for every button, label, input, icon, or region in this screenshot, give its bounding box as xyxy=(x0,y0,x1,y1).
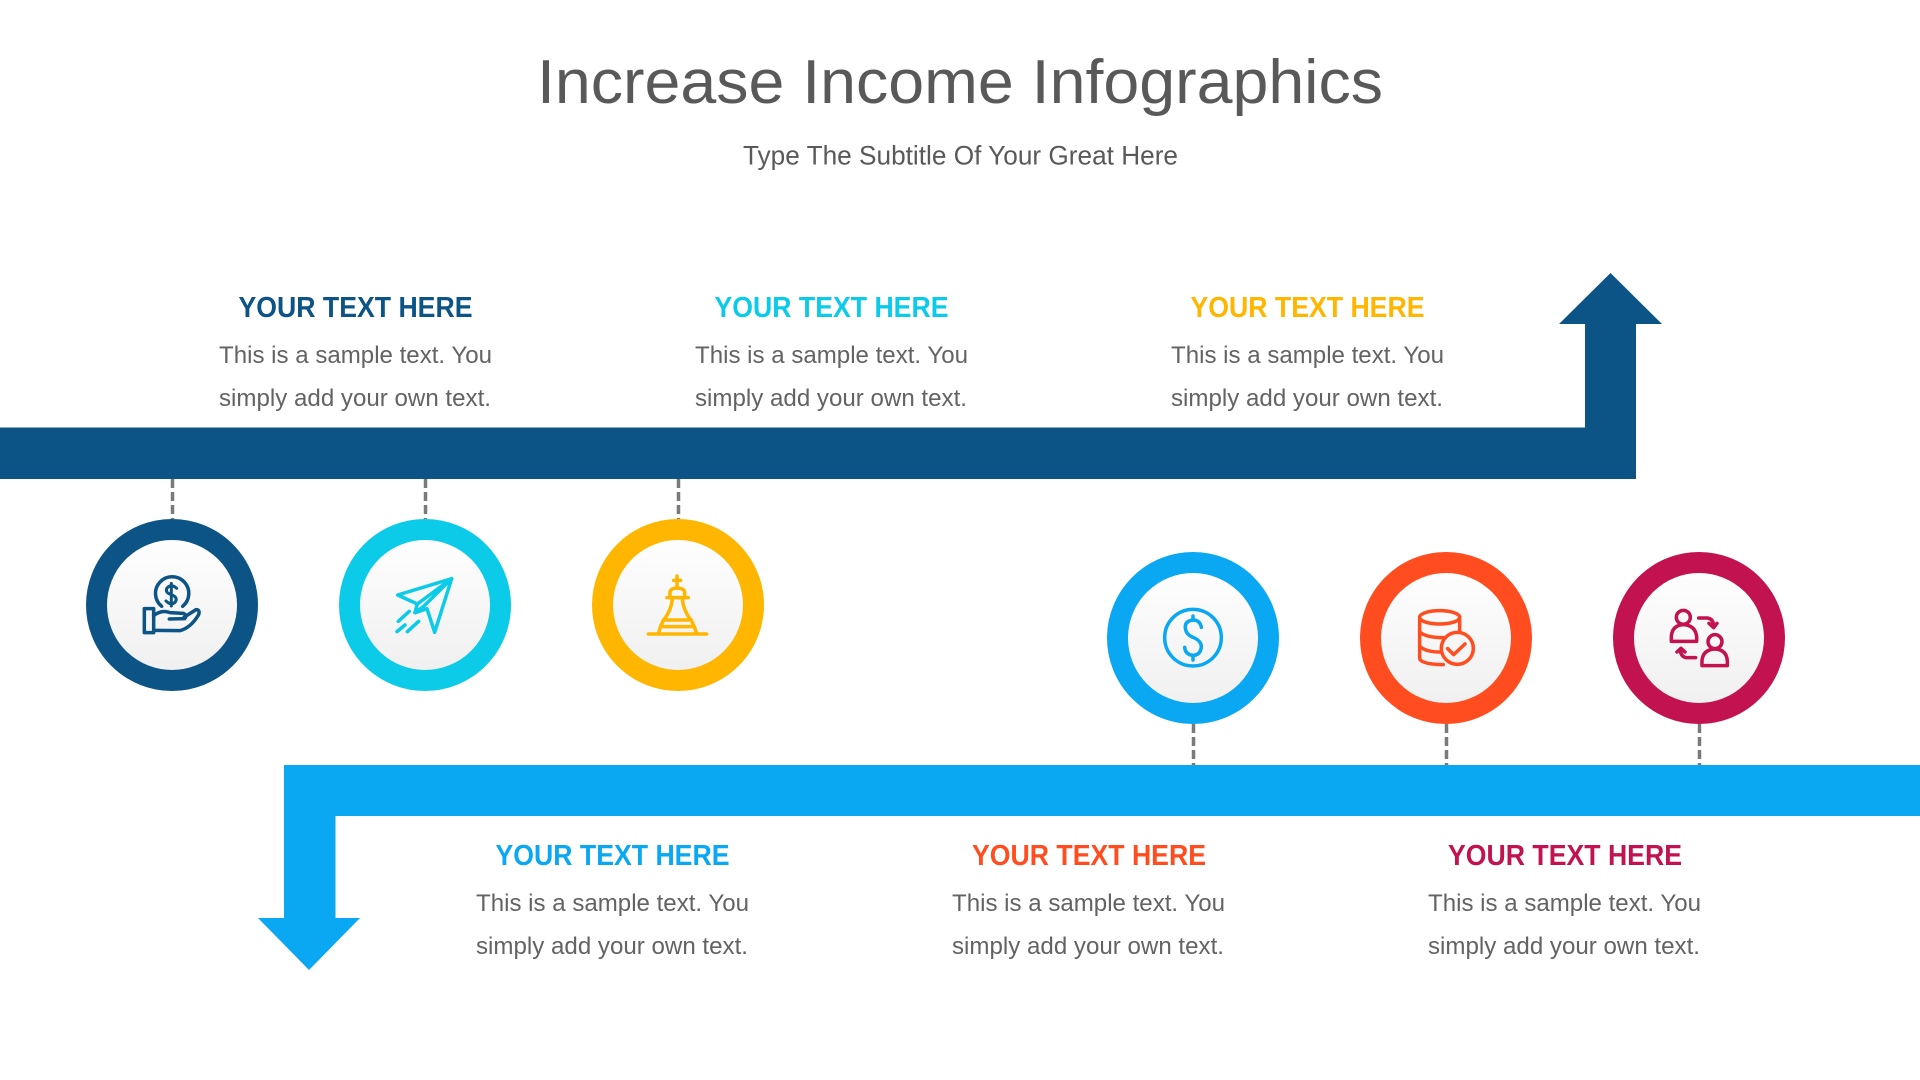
node 2: paper plane xyxy=(350,479,500,680)
text block 3 xyxy=(1171,292,1444,412)
text block 4: YOUR TEXT HERE xyxy=(496,840,730,872)
node 6: people exchange xyxy=(1624,562,1774,765)
text block 1: YOUR TEXT HERE xyxy=(238,292,472,324)
icon: dollar coin xyxy=(1165,609,1221,666)
text block 3: simply add your own text. xyxy=(1171,385,1443,412)
text block 2: This is a sample text. You xyxy=(695,342,968,369)
text block 6 xyxy=(1428,840,1701,960)
text block 6: simply add your own text. xyxy=(1428,933,1700,960)
text block 2: simply add your own text. xyxy=(695,385,967,412)
text block 2: YOUR TEXT HERE xyxy=(714,292,948,324)
node 4: dollar coin xyxy=(1118,562,1268,765)
text block 5: This is a sample text. You xyxy=(952,890,1225,917)
text block 6: This is a sample text. You xyxy=(1428,890,1701,917)
icon: people exchange xyxy=(1671,610,1727,666)
node 1: hand holding coin xyxy=(96,479,248,680)
text block 5: YOUR TEXT HERE xyxy=(972,840,1206,872)
text block 4: simply add your own text. xyxy=(476,933,748,960)
title: Increase Income Infographics xyxy=(537,48,1383,117)
node 3: chess king xyxy=(602,479,754,680)
text block 1: This is a sample text. You xyxy=(219,342,492,369)
arrow: bottom descending blue arrow xyxy=(258,765,1920,970)
icon: chess king xyxy=(648,576,707,634)
text block 4: This is a sample text. You xyxy=(476,890,749,917)
text block 1: simply add your own text. xyxy=(219,385,491,412)
text block 5 xyxy=(952,840,1225,960)
text block 2 xyxy=(695,292,968,412)
subtitle: Type The Subtitle Of Your Great Here xyxy=(743,140,1178,170)
text block 3: This is a sample text. You xyxy=(1171,342,1444,369)
icon: paper plane xyxy=(397,579,452,632)
text block 5: simply add your own text. xyxy=(952,933,1224,960)
text block 1 xyxy=(219,292,492,412)
node 5: database check xyxy=(1370,562,1522,765)
arrow: top rising navy arrow xyxy=(0,273,1662,479)
text block 6: YOUR TEXT HERE xyxy=(1448,840,1682,872)
icon: database with check xyxy=(1420,611,1473,665)
text block 3: YOUR TEXT HERE xyxy=(1190,292,1424,324)
icon: hand holding coin xyxy=(144,577,199,633)
text block 4 xyxy=(476,840,749,960)
